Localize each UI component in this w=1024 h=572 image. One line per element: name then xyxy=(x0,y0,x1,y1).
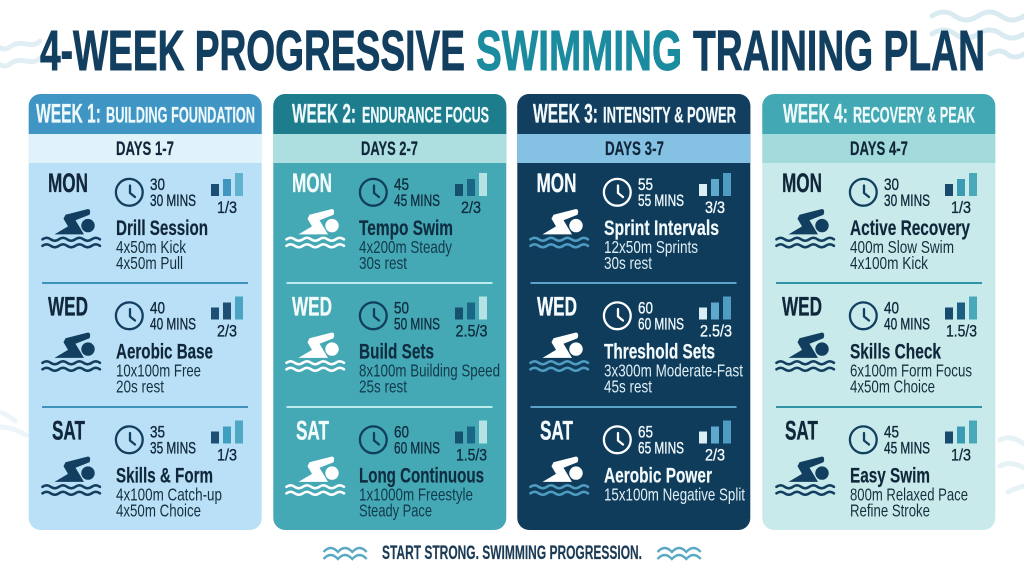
week 3 saturday: Aerobic Power xyxy=(604,464,712,488)
week 1 wednesday: 2/3 xyxy=(217,322,237,340)
background waves: top right xyxy=(932,12,1024,57)
week 3 saturday: 65 MINS xyxy=(638,438,684,458)
icon: footer waves left xyxy=(324,548,367,559)
week 2 saturday: SAT xyxy=(296,416,329,446)
week 1 wednesday: 20s rest xyxy=(116,376,164,396)
week 3 wednesday: 3x300m Moderate-Fast xyxy=(604,360,743,380)
week 3 wednesday: 45s rest xyxy=(604,376,652,396)
week 3 wednesday: 60 xyxy=(638,298,653,318)
week 2 monday: MON xyxy=(292,168,332,198)
week 3 monday: MON xyxy=(536,168,576,198)
week 4 wednesday: WED xyxy=(782,292,822,322)
week 4 monday: 400m Slow Swim xyxy=(850,237,954,257)
week 1 days: DAYS 1-7 xyxy=(116,139,174,160)
week 3 monday: 55 xyxy=(638,175,653,194)
week 3 monday: 30s rest xyxy=(604,253,652,273)
week 4 monday: Active Recovery xyxy=(850,216,970,240)
background waves: bottom right xyxy=(1000,438,1024,492)
week 2 monday: 4x200m Steady xyxy=(359,237,452,257)
week 2 saturday: Long Continuous xyxy=(359,464,484,488)
week 1 heading: BUILDING FOUNDATION xyxy=(106,103,255,128)
week 2 monday: Tempo Swim xyxy=(359,216,453,240)
week 3 heading: WEEK 3: xyxy=(533,99,598,129)
week 3 monday: 3/3 xyxy=(705,198,725,217)
week 4 days: DAYS 4-7 xyxy=(850,139,908,160)
week 1 monday: 1/3 xyxy=(217,198,237,217)
week 2 monday: 30s rest xyxy=(359,253,407,273)
week 1 wednesday: Aerobic Base xyxy=(116,340,213,364)
week 2 wednesday: Build Sets xyxy=(359,340,434,364)
icon: footer waves right xyxy=(658,548,701,559)
week 1 monday: 30 xyxy=(150,175,165,194)
week 3 wednesday: 60 MINS xyxy=(638,314,684,334)
week 4 wednesday: 4x50m Choice xyxy=(850,376,935,396)
week 1 monday: 4x50m Pull xyxy=(116,253,183,273)
week 4 saturday: Refine Stroke xyxy=(850,500,930,520)
week 3 saturday: 15x100m Negative Split xyxy=(604,484,745,504)
week 4 wednesday: Skills Check xyxy=(850,340,941,364)
week 3 wednesday: WED xyxy=(537,292,577,322)
week 2 saturday xyxy=(286,416,487,520)
week 2 saturday: 1.5/3 xyxy=(456,446,487,464)
week 4 wednesday: 40 xyxy=(884,298,899,318)
week 1 saturday: 4x100m Catch-up xyxy=(116,484,222,504)
week 3 monday: 12x50m Sprints xyxy=(604,237,698,257)
week 1 wednesday: WED xyxy=(48,292,88,322)
week 3 monday xyxy=(530,168,731,273)
week 4 wednesday: 40 MINS xyxy=(884,314,930,334)
week 4 monday: 30 MINS xyxy=(884,191,930,210)
week 4 saturday: Easy Swim xyxy=(850,464,930,488)
week 2 monday: 2/3 xyxy=(461,198,481,217)
week 1 saturday: 1/3 xyxy=(217,446,237,464)
week 1 saturday: SAT xyxy=(52,416,85,446)
week 1 monday: 4x50m Kick xyxy=(116,237,186,257)
week 2 wednesday: WED xyxy=(292,292,332,322)
week 2 saturday: 1x1000m Freestyle xyxy=(359,484,473,504)
week 4 heading xyxy=(783,99,975,129)
week 2 monday: 45 MINS xyxy=(394,191,440,210)
week 1 saturday: 35 xyxy=(150,422,165,442)
footer tagline: START STRONG. SWIMMING PROGRESSION. xyxy=(382,543,642,564)
panel: week 3 xyxy=(517,94,750,530)
week 3 saturday xyxy=(530,416,745,504)
week 1 monday xyxy=(42,168,243,273)
week 2 saturday: 60 xyxy=(394,422,409,442)
week 2 days: DAYS 2-7 xyxy=(361,139,418,160)
week 3 saturday: 65 xyxy=(638,422,653,442)
week 3 wednesday xyxy=(530,292,743,396)
week 2 heading xyxy=(292,99,489,129)
week 1 heading xyxy=(36,99,255,129)
panel: week 4 xyxy=(762,94,995,530)
week 1 saturday xyxy=(42,416,243,520)
week 4 saturday xyxy=(776,416,977,520)
week 3 monday: 55 MINS xyxy=(638,191,684,210)
week 1 wednesday: 10x100m Free xyxy=(116,360,201,380)
title: SWIMMING xyxy=(476,19,682,83)
week 2 saturday: Steady Pace xyxy=(359,500,432,520)
week 3 wednesday: 2.5/3 xyxy=(700,322,732,340)
week 1 monday: 30 MINS xyxy=(150,191,196,210)
week 1 saturday: Skills & Form xyxy=(116,464,213,488)
week 1 wednesday: 40 xyxy=(150,298,165,318)
week 3 heading: INTENSITY & POWER xyxy=(603,103,736,128)
week 4 monday: 30 xyxy=(884,175,899,194)
week 1 monday: Drill Session xyxy=(116,216,208,240)
background waves: left xyxy=(0,41,40,435)
week 2 wednesday: 25s rest xyxy=(359,376,407,396)
week 3 monday: Sprint Intervals xyxy=(604,216,719,240)
week 1 wednesday xyxy=(42,292,243,396)
week 1 monday: MON xyxy=(48,168,88,198)
week 4 monday: 4x100m Kick xyxy=(850,253,928,273)
week 2 saturday: 60 MINS xyxy=(394,438,440,458)
week 2 wednesday xyxy=(286,292,500,396)
week 4 wednesday: 6x100m Form Focus xyxy=(850,360,972,380)
week 4 saturday: SAT xyxy=(785,416,818,446)
week 1 wednesday: 40 MINS xyxy=(150,314,196,334)
panel: week 2 xyxy=(273,94,506,530)
week 3 saturday: SAT xyxy=(540,416,573,446)
week 2 wednesday: 50 xyxy=(394,298,409,318)
week 4 heading: WEEK 4: xyxy=(783,99,848,129)
week 2 heading: ENDURANCE FOCUS xyxy=(362,103,489,128)
week 1 saturday: 35 MINS xyxy=(150,438,196,458)
week 3 saturday: 2/3 xyxy=(705,446,725,464)
week 3 days: DAYS 3-7 xyxy=(605,139,664,160)
week 4 monday: MON xyxy=(782,168,822,198)
week 4 wednesday: 1.5/3 xyxy=(946,322,977,340)
week 1 saturday: 4x50m Choice xyxy=(116,500,201,520)
title: 4-WEEK PROGRESSIVE xyxy=(40,19,465,83)
week 4 saturday: 1/3 xyxy=(951,446,971,464)
week 4 saturday: 800m Relaxed Pace xyxy=(850,484,968,504)
week 4 wednesday xyxy=(776,292,977,396)
week 3 heading xyxy=(533,99,736,129)
week 2 monday xyxy=(286,168,487,273)
week 4 monday xyxy=(776,168,977,273)
week 4 saturday: 45 MINS xyxy=(884,438,930,458)
week 2 wednesday: 2.5/3 xyxy=(456,322,488,340)
week 1 heading: WEEK 1: xyxy=(36,99,101,129)
panel: week 1 xyxy=(29,94,262,530)
week 4 monday: 1/3 xyxy=(951,198,971,217)
week 2 wednesday: 50 MINS xyxy=(394,314,440,334)
week 2 heading: WEEK 2: xyxy=(292,99,356,129)
week 4 saturday: 45 xyxy=(884,422,899,442)
week 3 wednesday: Threshold Sets xyxy=(604,340,715,364)
week 2 monday: 45 xyxy=(394,175,409,194)
week 2 wednesday: 8x100m Building Speed xyxy=(359,360,500,380)
title xyxy=(40,19,985,83)
